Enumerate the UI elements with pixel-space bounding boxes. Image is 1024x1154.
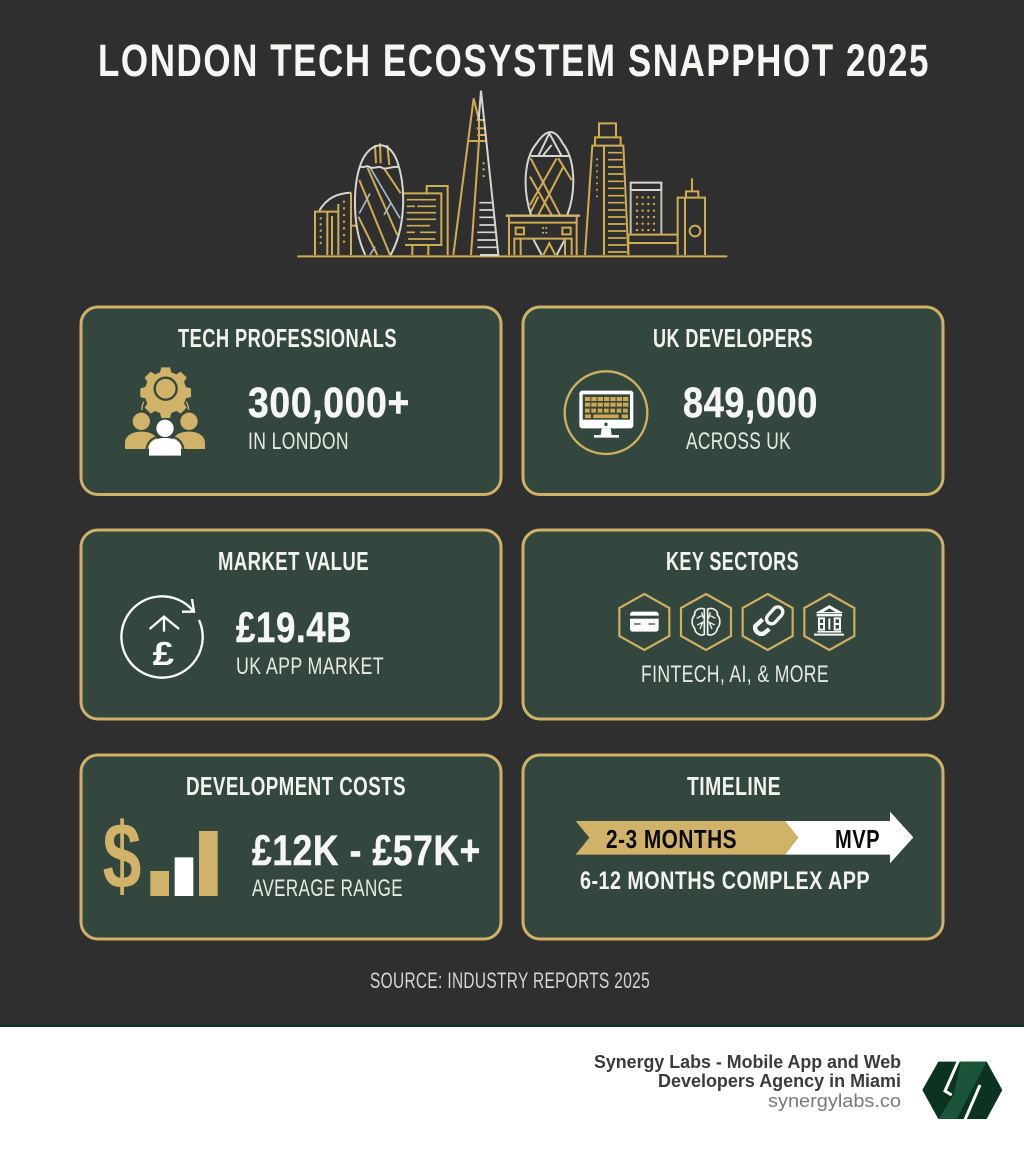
panel: key sectors	[523, 530, 943, 719]
gherkin tower two	[526, 132, 573, 255]
footer website: synergylabs.co	[768, 1090, 901, 1111]
timeline label: 2-3 months: 2-3 MONTHS	[606, 824, 737, 854]
stat label: ACROSS UK	[686, 428, 791, 455]
footer logo	[922, 1061, 1002, 1120]
heading: TIMELINE	[687, 771, 781, 801]
low block with lines	[404, 186, 448, 255]
podium building	[506, 216, 580, 255]
heading: MARKET VALUE	[218, 546, 369, 576]
panel: market value	[81, 530, 501, 719]
panel: tech professionals	[81, 307, 501, 494]
footer company name	[594, 1052, 901, 1091]
icon: circular arrow with pound: £	[153, 636, 175, 673]
footer band	[0, 1024, 1024, 1154]
icon: dollar and bars: $	[103, 803, 141, 908]
shard tower	[453, 91, 498, 255]
icon: circular arrow with pound	[121, 596, 203, 678]
icon: credit card	[619, 594, 669, 650]
stat value: 849,000	[683, 379, 818, 427]
stat value: £19.4B	[236, 604, 352, 652]
timeline label: MVP: MVP	[835, 824, 880, 854]
heading: UK DEVELOPERS	[653, 323, 813, 353]
tall office tower	[585, 123, 628, 255]
heading: TECH PROFESSIONALS	[178, 323, 397, 353]
stat label: AVERAGE RANGE	[252, 875, 403, 902]
icon: gear and people	[125, 367, 205, 456]
icon: dollar and bars	[103, 803, 218, 908]
timeline caption: 6-12 MONTHS COMPLEX APP	[580, 867, 870, 895]
source note: SOURCE: INDUSTRY REPORTS 2025	[370, 968, 650, 993]
icon: brain	[681, 594, 731, 650]
panel: timeline	[523, 755, 943, 939]
clock tower	[678, 178, 705, 255]
stat label: UK APP MARKET	[236, 653, 384, 680]
sector icons	[619, 594, 854, 650]
heading: DEVELOPMENT COSTS	[186, 771, 406, 801]
icon: chain link	[743, 594, 793, 650]
small grid building	[628, 183, 678, 255]
footer company name: Synergy Labs - Mobile App and Web	[594, 1052, 901, 1072]
left office building	[315, 193, 357, 255]
heading: KEY SECTORS	[666, 546, 799, 576]
sectors caption: FINTECH, AI, & MORE	[641, 661, 829, 688]
ground line	[297, 253, 727, 259]
stat label: IN LONDON	[248, 428, 349, 455]
illustration: London skyline	[297, 91, 727, 256]
panel: UK developers	[523, 307, 943, 494]
stat value: 300,000+	[248, 379, 410, 427]
footer company name: Developers Agency in Miami	[658, 1071, 901, 1091]
stat value: £12K - £57K+	[252, 827, 481, 875]
panel: development costs	[81, 755, 501, 939]
arrow: timeline bar	[576, 812, 913, 863]
icon: bank	[804, 594, 854, 650]
gherkin tower one	[355, 143, 403, 255]
icon: desktop monitor	[565, 371, 647, 454]
